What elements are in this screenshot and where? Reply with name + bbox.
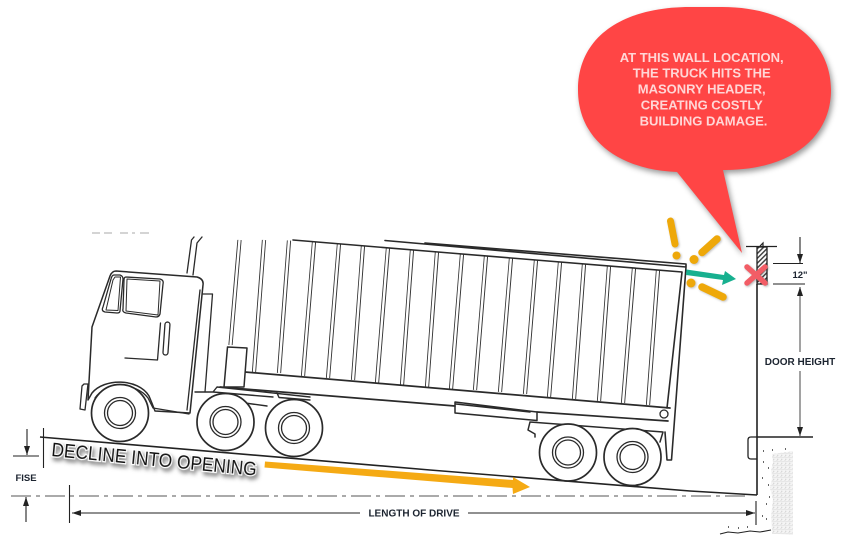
impact sparks <box>670 221 723 297</box>
trailer floor rail <box>220 372 670 442</box>
cab windows <box>102 275 163 317</box>
dimension: rise <box>13 428 44 522</box>
masonry header <box>757 247 767 284</box>
callout text: CREATING COSTLY <box>641 98 763 112</box>
datum dash-dot line <box>11 495 750 497</box>
wheels <box>92 384 661 486</box>
rib box <box>224 347 247 387</box>
callout bubble <box>578 7 831 253</box>
callout text: BUILDING DAMAGE. <box>640 114 767 128</box>
frame <box>195 387 310 406</box>
arrow: impact direction <box>686 270 736 285</box>
label: rise: FISE <box>15 473 37 484</box>
callout text: THE TRUCK HITS THE <box>633 66 771 80</box>
building wall section <box>746 243 813 495</box>
callout text: AT THIS WALL LOCATION, <box>620 50 784 65</box>
arrow: decline direction <box>264 462 530 494</box>
dimension: 12 inch and door height <box>773 237 805 436</box>
dimension: length of drive <box>70 485 756 525</box>
truck illustration <box>80 237 686 486</box>
foundation ground <box>720 449 793 535</box>
icon: impact cross <box>747 267 765 283</box>
decline label: DECLINE INTO OPENING <box>51 440 258 481</box>
trailer ribs <box>230 240 658 405</box>
faint marks above cab <box>92 232 149 234</box>
callout text: MASONRY HEADER, <box>638 82 766 96</box>
cab body <box>80 237 212 414</box>
ramp surface line <box>40 437 757 495</box>
label: 12 inch: 12" <box>792 270 808 281</box>
label: length of drive: LENGTH OF DRIVE <box>368 508 460 520</box>
label: door height: DOOR HEIGHT <box>765 357 835 368</box>
trailer roof and rear wall <box>293 240 686 460</box>
